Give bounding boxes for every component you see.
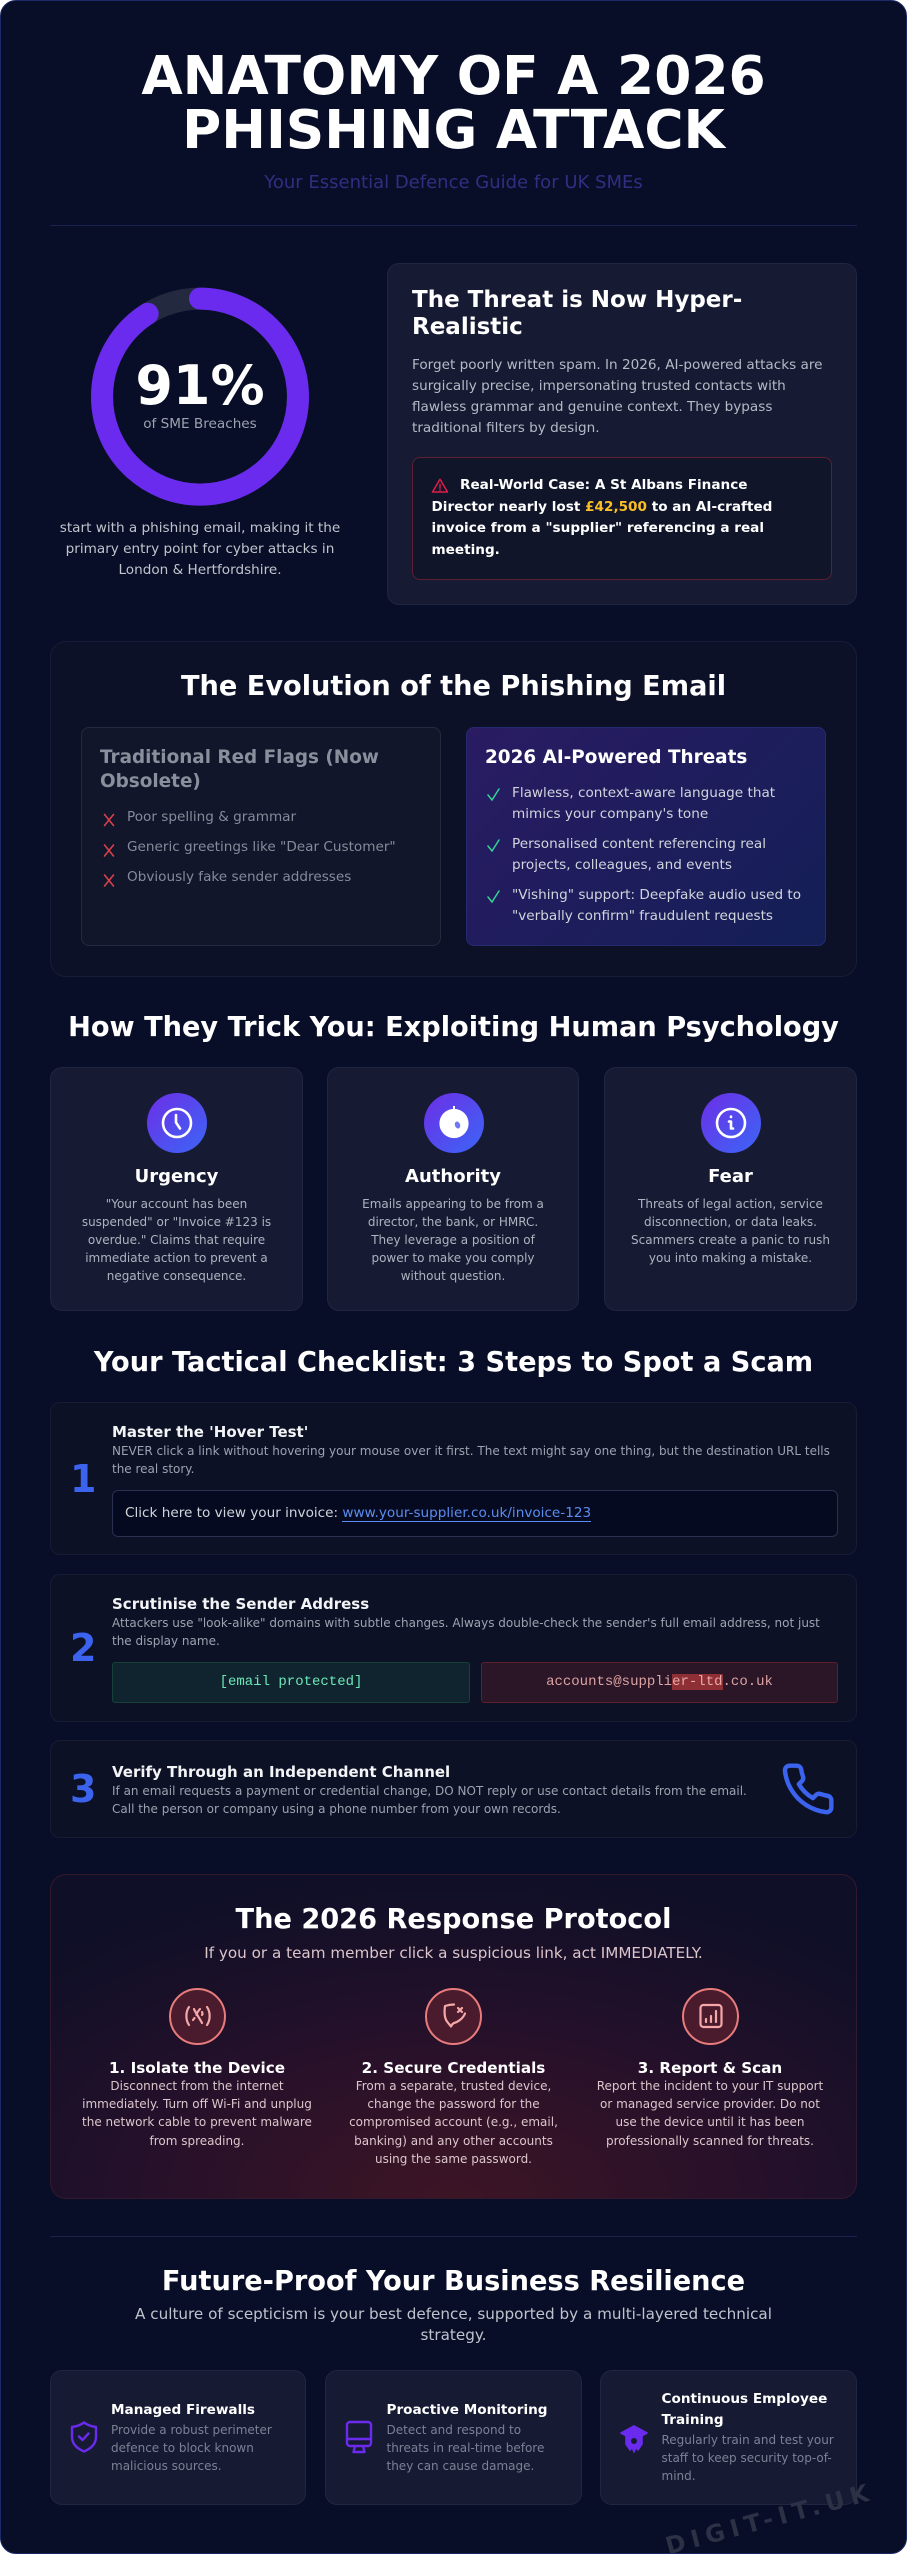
stat value: 91% bbox=[135, 354, 265, 416]
threat paragraph: flawless grammar and genuine context. They bypass bbox=[412, 398, 772, 414]
stat caption: primary entry point for cyber attacks in bbox=[66, 540, 334, 556]
panel: evolution of the phishing email bbox=[50, 641, 857, 977]
step 2 description: the display name. bbox=[112, 1634, 220, 1648]
future-proof heading: Future-Proof Your Business Resilience bbox=[162, 2266, 745, 2297]
step 1 body bbox=[82, 2079, 312, 2148]
fear text: Scammers create a panic to rush bbox=[631, 1233, 830, 1247]
training title bbox=[662, 2391, 827, 2428]
threat heading: The Threat is Now Hyper- bbox=[412, 286, 742, 312]
firewalls text: Provide a robust perimeter bbox=[111, 2422, 272, 2436]
future-proof subheading bbox=[135, 2304, 772, 2344]
evolution heading: The Evolution of the Phishing Email bbox=[181, 671, 726, 702]
icon: info bbox=[700, 1093, 760, 1153]
firewalls text bbox=[111, 2422, 272, 2473]
card: fear bbox=[604, 1067, 857, 1311]
subtitle: Your Essential Defence Guide for UK SMEs bbox=[264, 172, 643, 192]
response subheading: If you or a team member click a suspicious link, act IMMEDIATELY. bbox=[204, 1944, 703, 1962]
icon: authority badge bbox=[424, 1093, 484, 1153]
traditional list bbox=[104, 809, 396, 887]
urgency text: "Your account has been bbox=[106, 1196, 247, 1210]
authority text: director, the bank, or HMRC. bbox=[368, 1215, 538, 1229]
monitoring text: Detect and respond to bbox=[386, 2422, 521, 2436]
monitoring title: Proactive Monitoring bbox=[386, 2402, 548, 2418]
fear text: Threats of legal action, service bbox=[638, 1196, 823, 1210]
item 2: Generic greetings like "Dear Customer" bbox=[127, 839, 396, 855]
step 1 description: the real story. bbox=[112, 1462, 194, 1476]
response heading: The 2026 Response Protocol bbox=[236, 1904, 671, 1935]
urgency text bbox=[82, 1196, 271, 1283]
step 2 body: banking) and any other accounts bbox=[354, 2134, 553, 2148]
item 2: projects, colleagues, and events bbox=[512, 857, 732, 873]
icon: graduation cap bbox=[620, 2425, 648, 2453]
step 3 description: Call the person or company using a phone number from your own records. bbox=[112, 1802, 561, 1816]
step 3 panel bbox=[50, 1740, 857, 1838]
item 2: Personalised content referencing real bbox=[512, 836, 766, 852]
training text: staff to keep security top-of- bbox=[662, 2451, 832, 2465]
stat caption: start with a phishing email, making it the bbox=[60, 520, 340, 536]
icon: phone bbox=[782, 1764, 834, 1814]
traditional heading: Traditional Red Flags (Now bbox=[100, 746, 379, 768]
fake address box bbox=[481, 1662, 838, 1703]
step 1 body: from spreading. bbox=[149, 2134, 244, 2148]
step 3 description: If an email requests a payment or credential change, DO NOT reply or use contact details from the email. bbox=[112, 1784, 747, 1798]
urgency text: immediate action to prevent a bbox=[85, 1251, 268, 1265]
item 3: "verbally confirm" fraudulent requests bbox=[512, 908, 773, 924]
monitoring text: threats in real-time before bbox=[386, 2441, 544, 2455]
item 2 bbox=[512, 836, 766, 873]
training text bbox=[662, 2433, 834, 2483]
stat caption: London & Hertfordshire. bbox=[118, 562, 282, 578]
icon: check marks bbox=[487, 788, 500, 904]
card: authority bbox=[327, 1067, 579, 1311]
threat heading: Realistic bbox=[412, 314, 523, 340]
step 1 description: NEVER click a link without hovering your mouse over it first. The text might say one thing, but the destination URL tells bbox=[112, 1444, 830, 1458]
hover demo text: Click here to view your invoice: www.your-supplier.co.uk/invoice-123 bbox=[125, 1505, 591, 1521]
step 2 body: using the same password. bbox=[375, 2152, 532, 2166]
step 2 description bbox=[112, 1616, 820, 1648]
urgency title: Urgency bbox=[135, 1166, 218, 1187]
card: urgency bbox=[50, 1067, 303, 1311]
firewalls title: Managed Firewalls bbox=[111, 2402, 255, 2418]
fear text: you into making a mistake. bbox=[649, 1251, 812, 1265]
step 3 title: Verify Through an Independent Channel bbox=[112, 1762, 450, 1780]
traditional heading bbox=[100, 746, 379, 792]
authority text: without question. bbox=[401, 1269, 505, 1283]
step 3 description bbox=[112, 1784, 747, 1816]
case text: invoice from a "supplier" referencing a real bbox=[432, 520, 764, 536]
monitoring text: they can cause damage. bbox=[386, 2459, 534, 2473]
item 3: "Vishing" support: Deepfake audio used to bbox=[512, 887, 801, 903]
training title: Continuous Employee bbox=[662, 2391, 827, 2407]
AI threats heading: 2026 AI-Powered Threats bbox=[485, 746, 747, 768]
legit address box bbox=[112, 1662, 470, 1703]
step 2 body: change the password for the bbox=[367, 2097, 540, 2111]
step 2 title: 2. Secure Credentials bbox=[362, 2058, 545, 2076]
step 2 body: compromised account (e.g., email, bbox=[349, 2115, 558, 2129]
firewalls text: defence to block known bbox=[111, 2441, 254, 2455]
authority title: Authority bbox=[405, 1166, 501, 1187]
authority text bbox=[362, 1196, 544, 1283]
training text: mind. bbox=[662, 2469, 696, 2483]
panel: hyper-realistic threat bbox=[387, 263, 857, 605]
step 1 panel bbox=[50, 1402, 857, 1555]
case text: Director nearly lost £42,500 to an AI-crafted bbox=[432, 499, 772, 515]
case callout box bbox=[412, 457, 832, 580]
fear text: disconnection, or data leaks. bbox=[644, 1215, 817, 1229]
ring chart: 91% bbox=[91, 288, 309, 506]
step 1 body: Disconnect from the internet bbox=[110, 2079, 284, 2093]
step 2 title: Scrutinise the Sender Address bbox=[112, 1594, 369, 1612]
icon: secure credentials bbox=[425, 1988, 482, 2044]
legit address: [email protected] bbox=[220, 1674, 362, 1690]
case text: meeting. bbox=[432, 542, 500, 558]
step 1 body: the network cable to prevent malware bbox=[82, 2115, 312, 2129]
fear text bbox=[631, 1196, 830, 1265]
step 1 body: immediately. Turn off Wi-Fi and unplug bbox=[82, 2097, 312, 2111]
step 3 body: use the device until it has been bbox=[615, 2115, 805, 2129]
case text: Real-World Case: A St Albans Finance bbox=[460, 477, 747, 493]
item 1: mimics your company's tone bbox=[512, 806, 708, 822]
step 1 description bbox=[112, 1444, 830, 1476]
title: ANATOMY OF A 2026 bbox=[141, 44, 766, 106]
item 3 bbox=[512, 887, 801, 924]
step 1 number: 1 bbox=[70, 1456, 96, 1500]
checklist heading: Your Tactical Checklist: 3 Steps to Spot a Scam bbox=[94, 1346, 813, 1378]
training text: Regularly train and test your bbox=[662, 2433, 834, 2447]
step 3 body: Report the incident to your IT support bbox=[597, 2079, 823, 2093]
step 1 title: Master the 'Hover Test' bbox=[112, 1422, 308, 1440]
fake address: accounts@supplier-ltd.co.uk bbox=[546, 1674, 773, 1690]
title bbox=[141, 44, 766, 161]
case text bbox=[432, 477, 772, 558]
icon: isolate device bbox=[168, 1988, 226, 2044]
step 2 description: Attackers use "look-alike" domains with subtle changes. Always double-check the sender's full email address, not just bbox=[112, 1616, 820, 1630]
monitoring text bbox=[386, 2422, 544, 2473]
item 1: Poor spelling & grammar bbox=[127, 809, 296, 825]
icon: warning triangle bbox=[432, 478, 448, 493]
step 2 number: 2 bbox=[70, 1626, 96, 1670]
fear title: Fear bbox=[708, 1166, 753, 1187]
icon: cross marks bbox=[104, 814, 114, 887]
firewalls text: malicious sources. bbox=[111, 2459, 222, 2473]
step 3 number: 3 bbox=[70, 1767, 96, 1811]
threat paragraph: Forget poorly written spam. In 2026, AI-powered attacks are bbox=[412, 356, 822, 372]
step 2 body: From a separate, trusted device, bbox=[356, 2079, 551, 2093]
threat paragraph: traditional filters by design. bbox=[412, 420, 600, 436]
threat paragraph bbox=[412, 356, 822, 436]
item 3: Obviously fake sender addresses bbox=[127, 869, 351, 885]
stat caption bbox=[60, 520, 340, 578]
panel: response protocol bbox=[50, 1874, 857, 2199]
title: PHISHING ATTACK bbox=[182, 98, 725, 161]
card: managed firewalls bbox=[50, 2370, 306, 2505]
step 2 panel bbox=[50, 1574, 857, 1722]
future-proof subheading: A culture of scepticism is your best defence, supported by a multi-layered technical bbox=[135, 2304, 772, 2322]
card: traditional red flags bbox=[81, 727, 441, 946]
step 3 body: or managed service provider. Do not bbox=[600, 2097, 820, 2111]
authority text: Emails appearing to be from a bbox=[362, 1196, 544, 1210]
training title: Training bbox=[662, 2412, 724, 2428]
traditional heading: Obsolete) bbox=[100, 770, 201, 792]
icon: clock bbox=[146, 1093, 206, 1153]
card: employee training bbox=[600, 2370, 857, 2505]
icon: monitor bbox=[346, 2420, 372, 2454]
threat heading bbox=[412, 286, 742, 340]
AI threats list bbox=[487, 784, 801, 924]
card: proactive monitoring bbox=[325, 2370, 582, 2505]
urgency text: overdue." Claims that require bbox=[88, 1233, 265, 1247]
icon: report chart bbox=[682, 1988, 738, 2044]
urgency text: suspended" or "Invoice #123 is bbox=[82, 1215, 271, 1229]
step 2 body bbox=[349, 2079, 558, 2166]
psychology heading: How They Trick You: Exploiting Human Psychology bbox=[68, 1012, 839, 1043]
threat paragraph: surgically precise, impersonating trusted contacts with bbox=[412, 378, 786, 394]
authority text: They leverage a position of bbox=[371, 1233, 535, 1247]
step 3 title: 3. Report & Scan bbox=[638, 2058, 782, 2076]
future-proof subheading: strategy. bbox=[420, 2326, 486, 2344]
stat label: of SME Breaches bbox=[143, 416, 257, 432]
authority text: power to make you comply bbox=[371, 1251, 535, 1265]
item 1: Flawless, context-aware language that bbox=[512, 784, 775, 800]
item 1 bbox=[512, 784, 775, 822]
urgency text: negative consequence. bbox=[107, 1269, 246, 1283]
hover demo box bbox=[112, 1490, 838, 1537]
card: 2026 AI threats bbox=[466, 727, 826, 946]
step 3 body bbox=[597, 2079, 823, 2148]
step 1 title: 1. Isolate the Device bbox=[109, 2058, 285, 2076]
step 3 body: professionally scanned for threats. bbox=[606, 2134, 814, 2148]
icon: shield bbox=[70, 2421, 98, 2453]
